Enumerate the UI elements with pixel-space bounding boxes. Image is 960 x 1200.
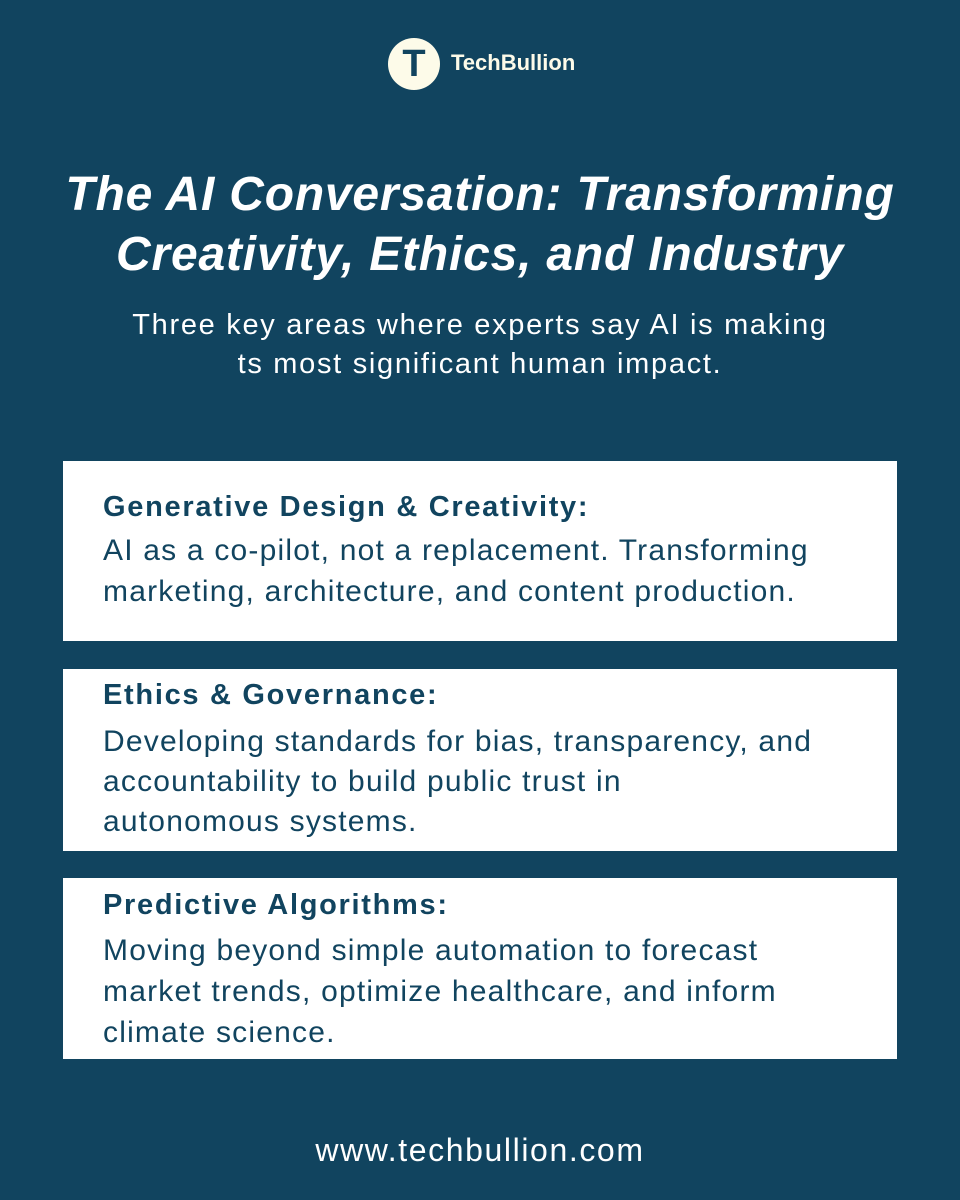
- brand name: TechBullion: [451, 50, 575, 75]
- panel: ethics: Ethics & Governance:: [103, 679, 438, 711]
- icon: T circle: T: [402, 43, 426, 85]
- panel: ethics: autonomous systems.: [103, 805, 418, 838]
- panel: ethics: Developing standards for bias, transparency, and: [103, 725, 812, 758]
- panel: ethics: accountability to build public trust in: [103, 765, 622, 798]
- panel: predictive: Moving beyond simple automation to forecast: [103, 934, 758, 967]
- panel: generative design: marketing, architecture, and content production.: [103, 575, 796, 608]
- title: Creativity, Ethics, and Industry: [116, 228, 844, 281]
- panel: predictive: [63, 878, 897, 1059]
- title: The AI Conversation: Transforming: [65, 168, 895, 221]
- title: [65, 168, 895, 281]
- panel: generative design: [63, 461, 897, 641]
- panel: predictive: climate science.: [103, 1016, 336, 1049]
- panel: predictive: Predictive Algorithms:: [103, 889, 449, 921]
- panel: generative design: AI as a co-pilot, not a replacement. Transforming: [103, 534, 809, 567]
- logo: [388, 38, 575, 90]
- panel: predictive: market trends, optimize healthcare, and inform: [103, 975, 777, 1008]
- subtitle: Three key areas where experts say AI is making: [132, 309, 828, 341]
- icon: T circle: [388, 38, 440, 90]
- subtitle: ts most significant human impact.: [238, 348, 722, 380]
- panel: generative design: Generative Design & Creativity:: [103, 491, 589, 523]
- subtitle: [132, 309, 828, 380]
- panel: ethics: [63, 669, 897, 851]
- footer url: www.techbullion.com: [315, 1132, 645, 1168]
